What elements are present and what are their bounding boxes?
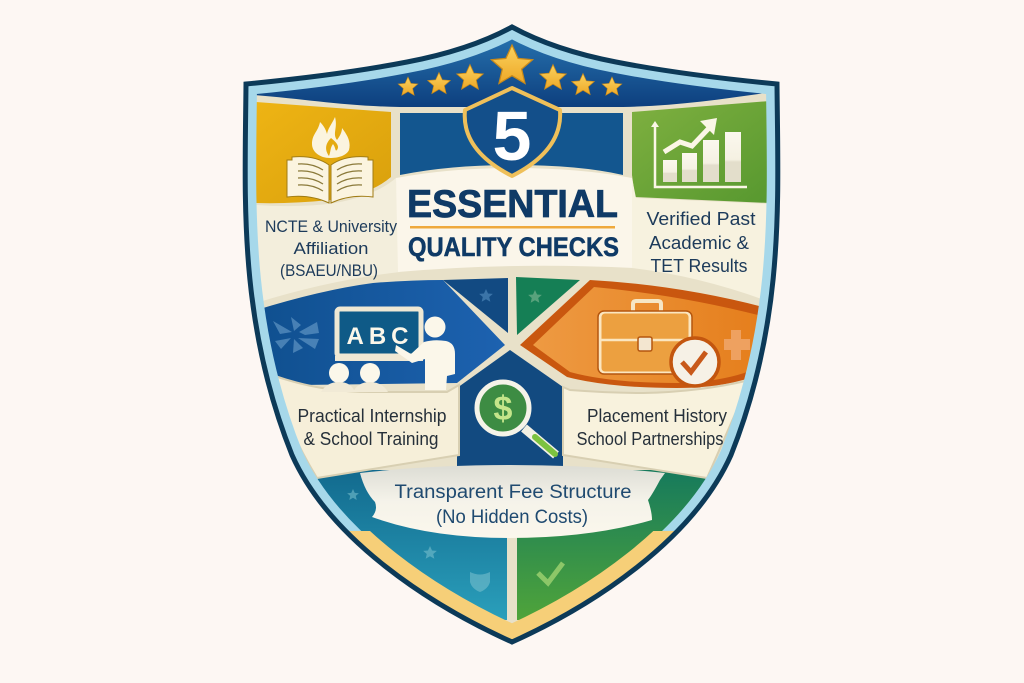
label: internship: & School Training: [304, 429, 438, 449]
check watermark: [538, 563, 563, 583]
label: verified results: TET Results: [650, 255, 748, 276]
rating stars: [398, 45, 622, 95]
shield panels: [240, 27, 780, 620]
icon: teacher at board: [321, 309, 455, 392]
label: fee structure: (No Hidden Costs): [436, 507, 588, 528]
panel: yellow affiliation: [256, 102, 391, 203]
label background: affiliation: [256, 178, 400, 303]
label: verified results: Verified Past: [646, 208, 756, 229]
icon: book and flame: [287, 117, 373, 203]
label: fee structure: [394, 482, 632, 528]
label: NCTE affiliation: Affiliation: [294, 239, 368, 258]
snowflake watermark: [273, 317, 319, 353]
title: [407, 183, 619, 262]
shield body: [245, 27, 778, 642]
label: placement: [576, 406, 727, 449]
label: verified results: [646, 208, 756, 276]
title: QUALITY CHECKS: [408, 232, 619, 262]
label: NCTE affiliation: [265, 217, 397, 280]
label: internship: Practical Internship: [298, 406, 446, 426]
panel: navy wedge: [443, 278, 508, 333]
label background: results: [632, 178, 770, 302]
shield border: [245, 27, 778, 642]
label: fee structure: Transparent Fee Structure: [394, 482, 632, 503]
panel: teal lower: [318, 470, 507, 620]
number badge: 5: [493, 97, 531, 175]
number badge: [465, 88, 560, 176]
panel: navy centre house: [457, 350, 563, 470]
panel: orange inner: [533, 287, 762, 383]
watermark icons lower: [347, 489, 490, 592]
label: NCTE affiliation: NCTE & University: [265, 217, 397, 236]
panel: green wedge: [516, 277, 580, 335]
panel: green results: [632, 101, 770, 203]
label: NCTE affiliation: (BSAEU/NBU): [280, 261, 378, 280]
cream ribbon: [360, 465, 665, 538]
internship label card: [272, 375, 459, 478]
label: placement: Placement History: [587, 406, 727, 426]
title banner: [396, 168, 634, 272]
icon: magnifier with dollar: $: [494, 390, 513, 428]
shield infographic: [242, 24, 780, 645]
title: ESSENTIAL: [407, 183, 618, 226]
panel: blue internship: [250, 280, 505, 385]
green wedge mark: [528, 290, 542, 303]
icon: teacher at board: ABC: [346, 323, 414, 350]
label: verified results: Academic &: [649, 232, 750, 253]
icon: growth chart: [651, 118, 747, 187]
placement label card: [563, 380, 750, 478]
top star band: [256, 40, 762, 107]
label: internship: [298, 406, 446, 449]
panel: centre blue backdrop: [400, 113, 623, 175]
navy wedge mark: [479, 289, 493, 302]
icon: briefcase with check: [598, 301, 719, 386]
plus watermark: [724, 330, 750, 360]
label: placement: School Partnerships: [576, 429, 724, 449]
panel: green lower: [517, 470, 706, 620]
panel: orange placement: [520, 280, 767, 388]
icon: magnifier with dollar: [477, 382, 556, 455]
